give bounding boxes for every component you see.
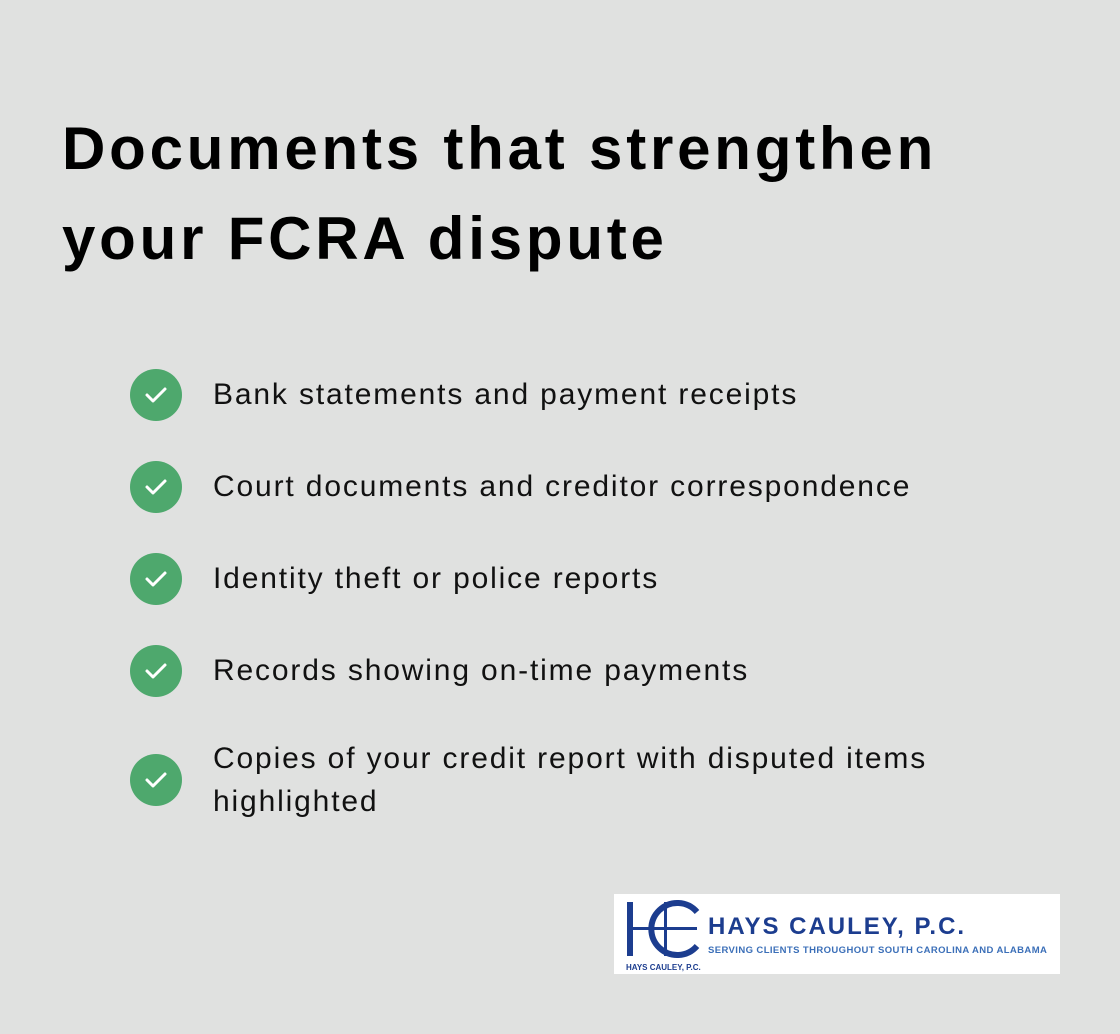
icon: check <box>130 461 182 513</box>
icon: check <box>130 754 182 806</box>
item 5 <box>130 742 927 818</box>
text: Copies of your credit report with disputed items <box>213 742 927 775</box>
logo tagline: SERVING CLIENTS THROUGHOUT SOUTH CAROLINA AND ALABAMA <box>708 945 1047 956</box>
item 2 <box>130 461 911 513</box>
text: Identity theft or police reports <box>213 562 659 595</box>
icon: check <box>130 369 182 421</box>
text <box>213 742 927 818</box>
title: Documents that strengthen <box>62 115 937 182</box>
title <box>62 115 937 272</box>
item 1 <box>130 369 798 421</box>
logo name: HAYS CAULEY, P.C. <box>708 913 966 940</box>
text: Court documents and creditor correspondence <box>213 470 911 503</box>
icon: check <box>130 553 182 605</box>
icon: check <box>130 645 182 697</box>
item 4 <box>130 645 749 697</box>
text: Records showing on-time payments <box>213 654 749 687</box>
logo <box>614 894 1060 974</box>
text: Bank statements and payment receipts <box>213 378 798 411</box>
title: your FCRA dispute <box>62 205 668 272</box>
logo mark: HAYS CAULEY, P.C. <box>626 963 701 972</box>
item 3 <box>130 553 659 605</box>
logo mark <box>626 900 701 972</box>
text: highlighted <box>213 785 378 818</box>
